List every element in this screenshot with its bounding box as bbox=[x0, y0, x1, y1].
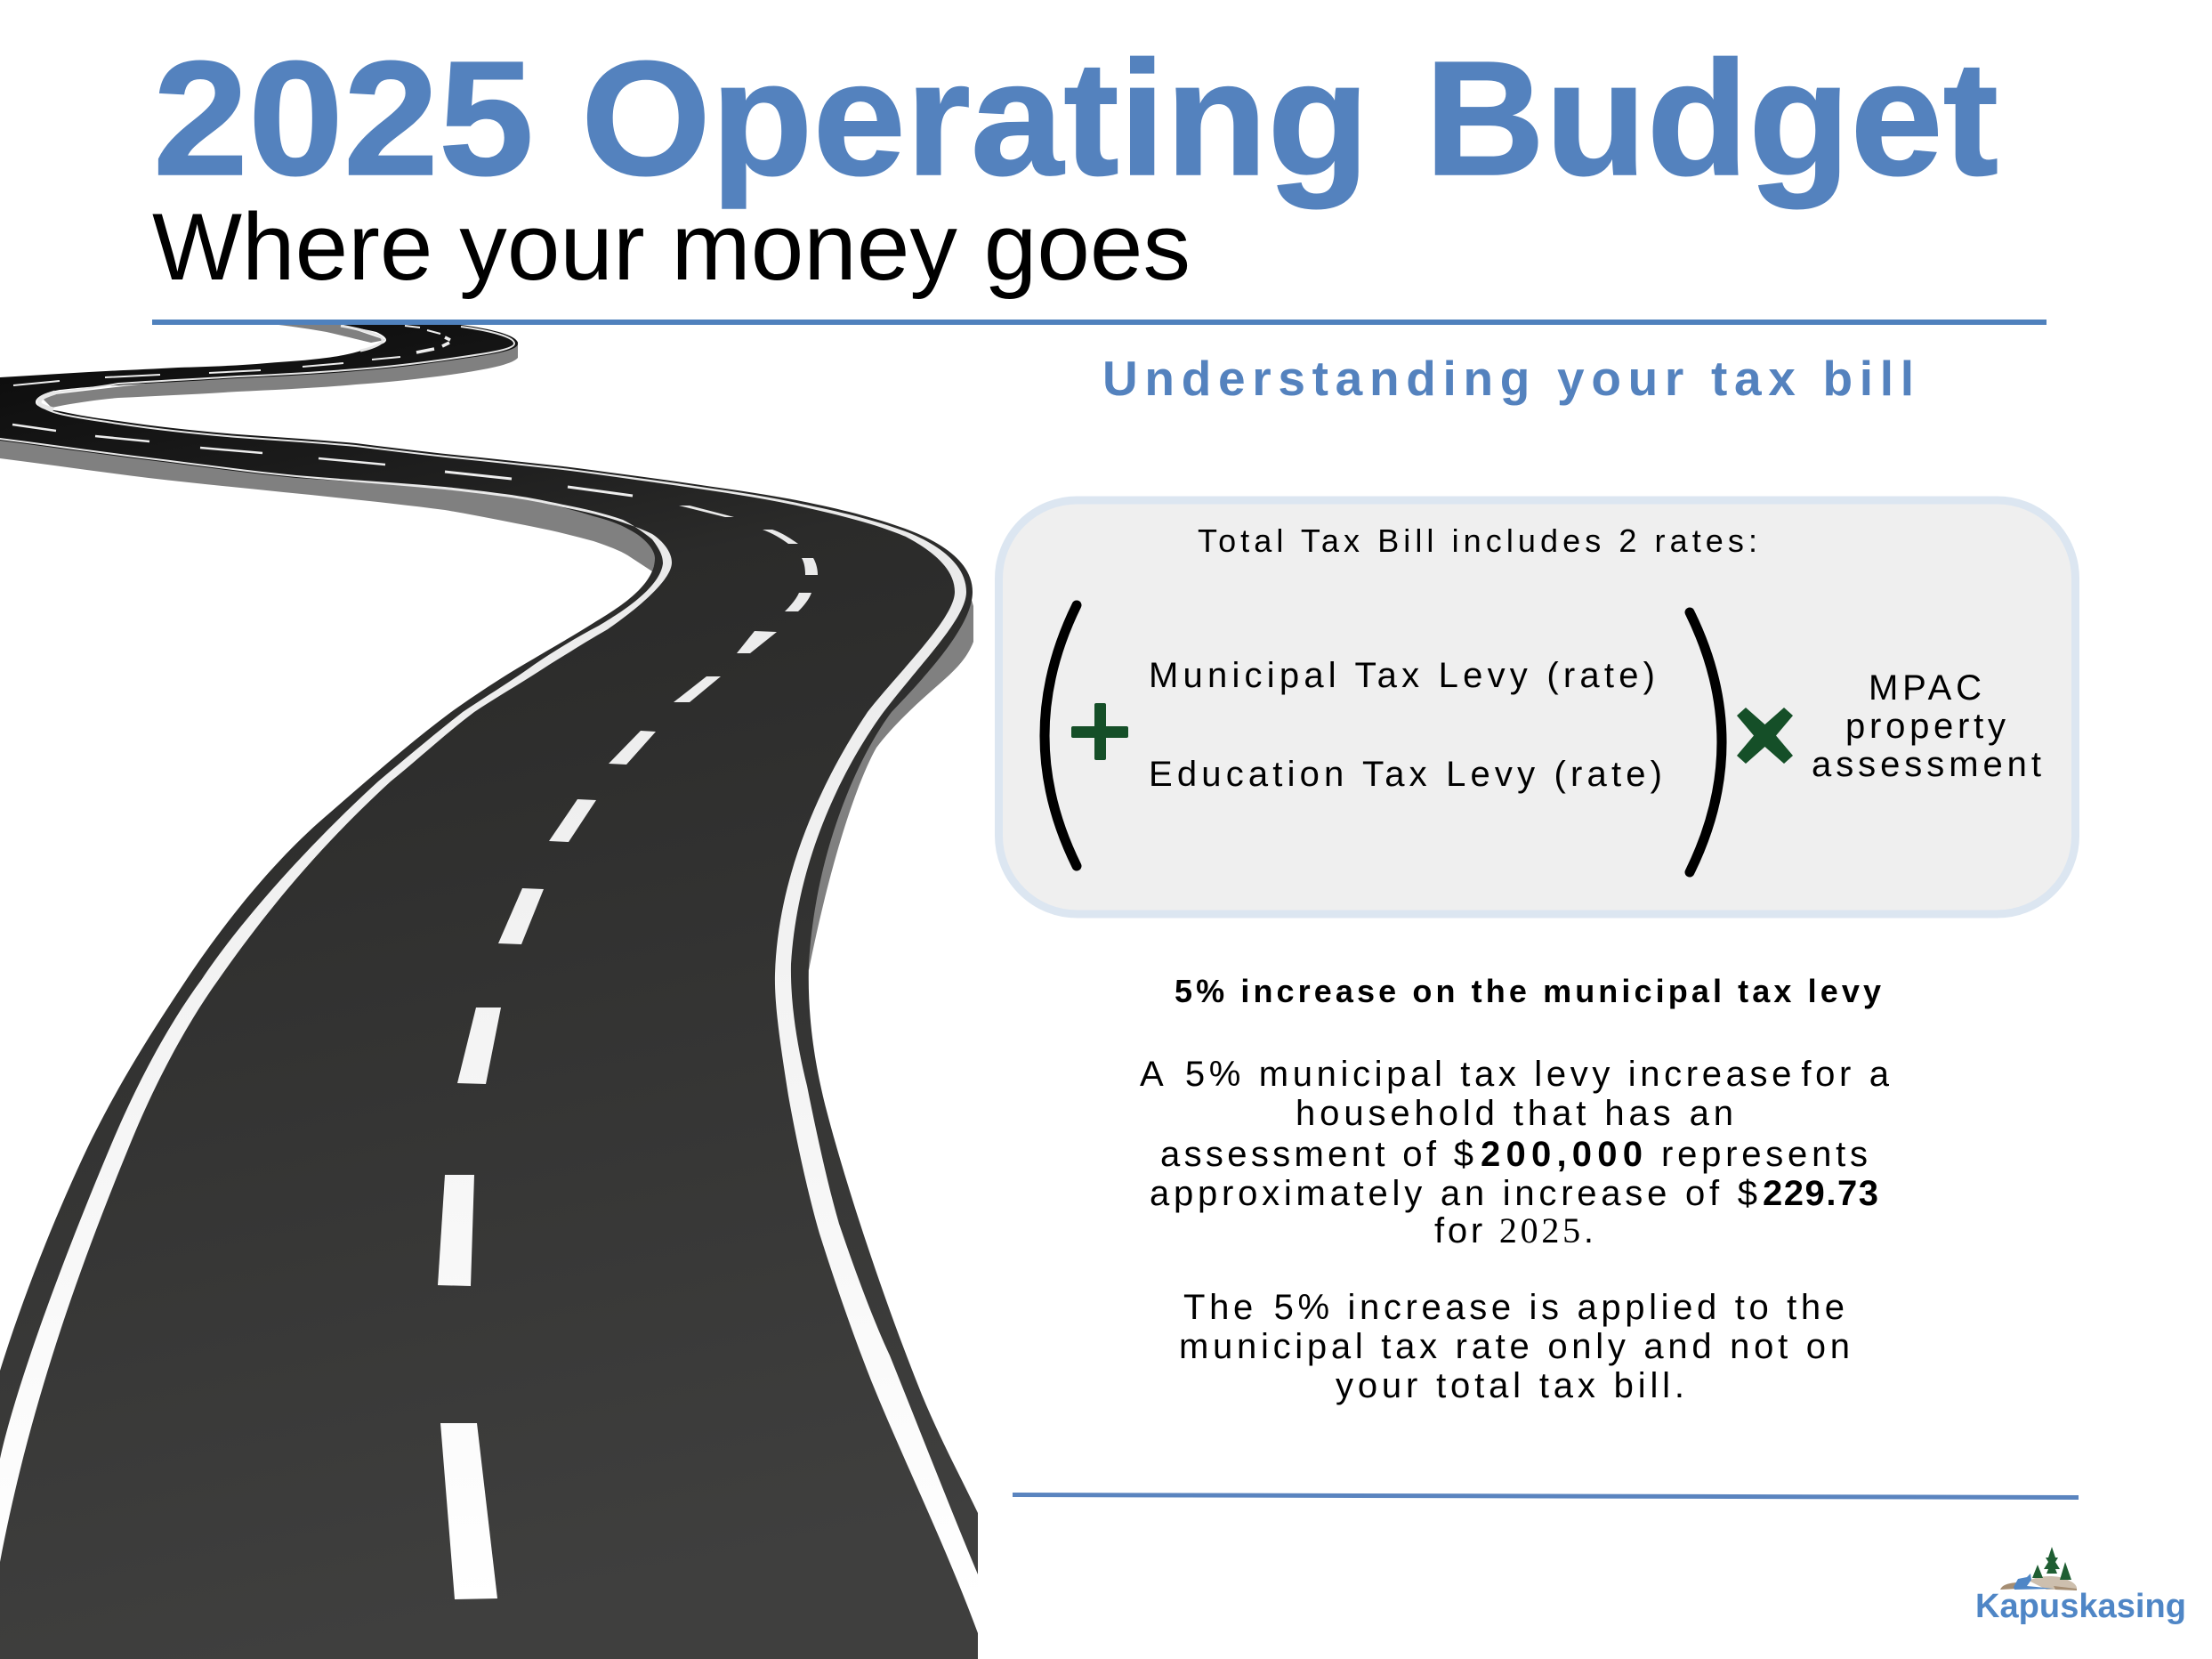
text block: scope note bbox=[1179, 1288, 1850, 1405]
text block: increase heading: 5% increase on the municipal tax levy bbox=[1175, 973, 1881, 1009]
MPAC label: MPAC bbox=[1869, 668, 1982, 708]
bottom rule bbox=[1013, 1493, 2079, 1500]
text block: household example: for 2025. bbox=[1434, 1210, 1594, 1250]
section heading: Understanding your tax bill bbox=[1102, 351, 1914, 406]
education levy label: Education Tax Levy (rate) bbox=[1149, 755, 1662, 794]
text block: household example: approximately an increase of $ bbox=[1150, 1174, 1757, 1213]
far edge lines bbox=[39, 326, 514, 424]
title bbox=[153, 27, 1998, 209]
text block: scope note: The 5% increase is applied to the bbox=[1183, 1288, 1845, 1327]
MPAC label: assessment bbox=[1812, 745, 2041, 784]
logo rocks bbox=[2029, 1576, 2077, 1590]
right bracket bbox=[1690, 612, 1722, 872]
title: Operating bbox=[581, 27, 1369, 209]
text block: household example: A 5% municipal tax levy increase for a bbox=[1140, 1055, 1890, 1094]
text block: household example: 200,000 bbox=[1481, 1135, 1643, 1174]
text block: household example: 229.73 bbox=[1763, 1174, 1878, 1213]
road illustration bbox=[0, 325, 978, 1659]
text block: scope note: municipal tax rate only and not on bbox=[1179, 1327, 1850, 1366]
left bracket bbox=[1045, 605, 1077, 866]
text block: household example: assessment of $ bbox=[1160, 1135, 1473, 1174]
center dashes: near bbox=[438, 506, 818, 1599]
header rule bbox=[152, 320, 2047, 325]
text block: household example: represents bbox=[1661, 1135, 1868, 1174]
municipal levy label: Municipal Tax Levy (rate) bbox=[1149, 656, 1655, 695]
text block: household example: household that has an bbox=[1296, 1094, 1733, 1133]
logo water bbox=[2014, 1574, 2054, 1590]
logo wordmark: Kapuskasing bbox=[1975, 1588, 2186, 1625]
center dashes: far bbox=[12, 326, 633, 496]
icon: plus bbox=[1071, 703, 1128, 760]
edge line: right side bbox=[118, 423, 978, 1633]
panel background bbox=[998, 500, 2075, 914]
panel heading: Total Tax Bill includes 2 rates: bbox=[1198, 522, 1757, 559]
subtitle: Where your money goes bbox=[152, 193, 1191, 300]
logo trees bbox=[2032, 1547, 2071, 1580]
edge line: left side bbox=[0, 438, 672, 1562]
title: Budget bbox=[1425, 27, 1998, 209]
MPAC label: property bbox=[1845, 707, 2006, 746]
logo: Kapuskasing bbox=[1975, 1547, 2186, 1625]
title: 2025 bbox=[153, 27, 534, 209]
text block: scope note: your total tax bill. bbox=[1336, 1366, 1684, 1405]
icon: multiply bbox=[1737, 708, 1793, 764]
road shoulder shading bbox=[0, 325, 973, 970]
panel: tax bill formula bbox=[998, 500, 2075, 914]
MPAC label bbox=[1812, 668, 2041, 784]
text block: household example bbox=[1140, 1055, 1890, 1250]
road surface bbox=[0, 325, 978, 1659]
